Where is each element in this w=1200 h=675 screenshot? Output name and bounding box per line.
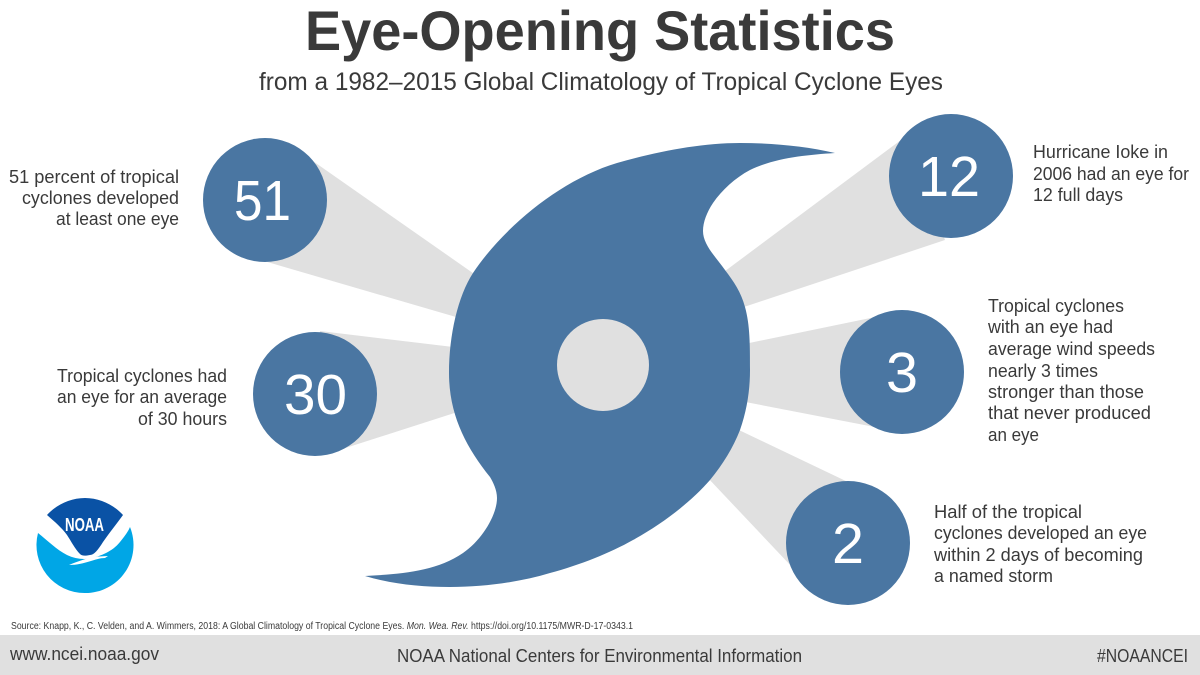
- stat circle: 51: [203, 138, 327, 262]
- stat circle: 2: 2: [832, 512, 864, 576]
- subtitle: from a 1982–2015 Global Climatology of Tropical Cyclone Eyes: [259, 68, 943, 96]
- stat text: wind speeds: Tropical cyclones: [988, 296, 1124, 316]
- stat text: within 2 days: cyclones developed an eye: [934, 523, 1147, 543]
- stat text: wind speeds: with an eye had: [987, 317, 1113, 337]
- source citation: Source: Knapp, K., C. Velden, and A. Wimmers, 2018: A Global Climatology of Tropical Cyclone Eyes. Mon. Wea. Rev. https://doi.org/10.1175/MWR-D-17-0343.1: [11, 621, 633, 632]
- stat text: Hurricane Ioke: 2006 had an eye for: [1033, 164, 1189, 184]
- stat circle: 12: 12: [918, 145, 980, 209]
- stat text: within 2 days: a named storm: [934, 566, 1053, 586]
- stat text: 30 hours: [57, 366, 227, 429]
- stat text: wind speeds: an eye: [988, 425, 1039, 445]
- stat text: 51 percent: 51 percent of tropical: [9, 167, 179, 187]
- title: Eye-Opening Statistics: [305, 0, 895, 62]
- stat circle: 30: [253, 332, 377, 456]
- stat circle: 30: 30: [284, 363, 347, 427]
- stat text: 51 percent: cyclones developed: [22, 188, 179, 208]
- cyclone symbol: [365, 143, 835, 587]
- stat text: Hurricane Ioke: [1033, 142, 1189, 205]
- cyclone eye: [557, 319, 649, 411]
- footer organisation: NOAA National Centers for Environmental Information: [397, 646, 802, 666]
- stat text: wind speeds: nearly 3 times: [988, 361, 1098, 381]
- stat text: 51 percent: [9, 167, 179, 229]
- light beams connecting stat circles to the eye: [250, 137, 945, 586]
- stat text: within 2 days: within 2 days of becoming: [933, 545, 1143, 565]
- stat circle: 2: [786, 481, 910, 605]
- stat text: 30 hours: of 30 hours: [138, 409, 227, 429]
- stat text: Hurricane Ioke: Hurricane Ioke in: [1033, 142, 1168, 162]
- stat text: wind speeds: stronger than those: [988, 382, 1144, 402]
- stat circle: 3: [840, 310, 964, 434]
- stat text: 30 hours: an eye for an average: [57, 387, 227, 407]
- stat text: within 2 days: Half of the tropical: [934, 502, 1082, 522]
- stat circle: 3: 3: [886, 341, 918, 405]
- NOAA wordmark: NOAA: [65, 515, 104, 535]
- stat text: within 2 days: [933, 502, 1147, 586]
- stat text: 30 hours: Tropical cyclones had: [57, 366, 227, 386]
- footer band: [0, 635, 1200, 675]
- stat circle: 12: [889, 114, 1013, 238]
- stat text: Hurricane Ioke: 12 full days: [1033, 185, 1123, 205]
- stat text: 51 percent: at least one eye: [56, 209, 179, 229]
- icon: NOAA logo: [36, 498, 134, 593]
- stat text: wind speeds: [987, 296, 1155, 445]
- footer hashtag: #NOAANCEI: [1097, 646, 1188, 666]
- stat circle: 51: 51: [234, 169, 291, 233]
- footer url: www.ncei.noaa.gov: [9, 644, 159, 664]
- stat text: wind speeds: that never produced: [988, 403, 1151, 423]
- stat text: wind speeds: average wind speeds: [988, 339, 1155, 359]
